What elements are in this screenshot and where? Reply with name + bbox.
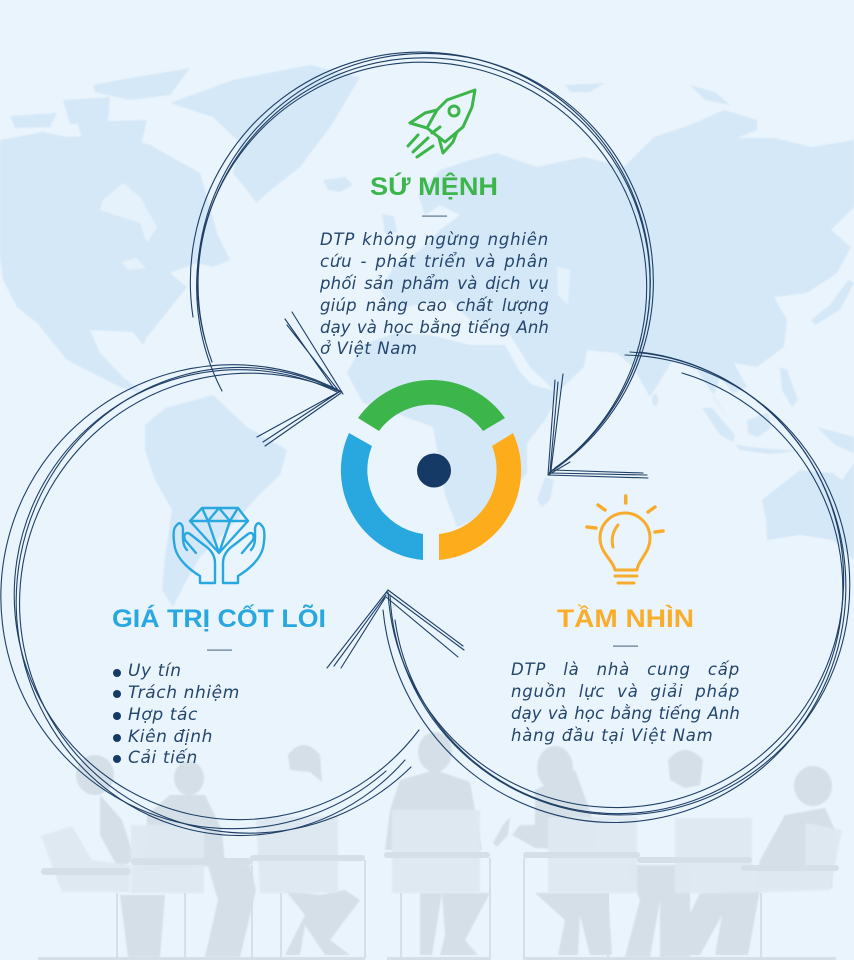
UK xyxy=(382,214,397,234)
heading: giá trị cốt lõi: GIÁ TRỊ CỐT LÕI xyxy=(112,603,326,633)
bullet list: giá trị cốt lõi: Hợp tác xyxy=(128,705,198,725)
Arctic islands xyxy=(10,68,190,150)
text block: sứ mệnh xyxy=(320,230,549,358)
person 5 xyxy=(512,746,612,955)
Africa xyxy=(347,333,560,527)
divider xyxy=(207,650,232,651)
world map background xyxy=(0,65,854,607)
heading: sứ mệnh: SỨ MỆNH xyxy=(370,171,498,201)
text block: tầm nhìn: DTP là nhà cung cấp xyxy=(511,660,740,679)
Iceland xyxy=(323,177,353,192)
Hudson Bay and inland water xyxy=(100,183,570,305)
heading: tầm nhìn: TẦM NHÌN xyxy=(557,604,694,633)
meeting chairs xyxy=(41,810,842,893)
text block: sứ mệnh: phối sản phẩm và dịch vụ xyxy=(320,274,549,293)
South America xyxy=(145,395,287,607)
text block: sứ mệnh: giúp nâng cao chất lượng xyxy=(320,296,549,315)
bullet list: giá trị cốt lõi: Trách nhiệm xyxy=(128,683,240,703)
person 2 xyxy=(145,761,256,957)
panel: tầm nhìn heading group xyxy=(557,496,694,647)
divider xyxy=(613,646,638,647)
arrowhead: left circle xyxy=(257,312,343,446)
arrowhead: top circle xyxy=(548,374,648,478)
bullet list: giá trị cốt lõi: Cải tiến xyxy=(128,748,198,768)
panel: sứ mệnh heading group xyxy=(370,90,498,217)
text block: tầm nhìn: dạy và học bằng tiếng Anh xyxy=(511,704,740,723)
Japan xyxy=(811,280,854,325)
icon: rocket xyxy=(408,90,475,157)
central ring xyxy=(341,380,521,560)
chair arms, legs and floor bars xyxy=(38,852,839,960)
person 3 xyxy=(258,745,360,955)
right sketched circle arrow xyxy=(327,352,850,822)
person 7 xyxy=(670,766,835,955)
arrowhead: right circle xyxy=(327,590,464,668)
bullets xyxy=(113,669,121,763)
text block: sứ mệnh: dạy và học bằng tiếng Anh xyxy=(320,318,549,337)
bullet list: giá trị cốt lõi: Uy tín xyxy=(128,661,182,681)
text block: sứ mệnh: cứu - phát triển và phân xyxy=(320,252,549,271)
bullet list: giá trị cốt lõi xyxy=(128,661,240,768)
Australia xyxy=(762,463,854,560)
Arctic Russia xyxy=(565,83,730,105)
panel: giá trị cốt lõi heading group xyxy=(112,508,326,763)
Sri Lanka xyxy=(652,394,658,406)
text block: tầm nhìn: nguồn lực và giải pháp xyxy=(511,682,740,701)
text block: sứ mệnh: DTP không ngừng nghiên xyxy=(320,230,549,249)
text block: tầm nhìn xyxy=(511,660,740,745)
Greenland xyxy=(170,65,360,203)
person 6 xyxy=(625,750,703,957)
Eurasia xyxy=(380,110,854,422)
divider xyxy=(422,216,447,217)
Madagascar xyxy=(537,477,554,507)
icon: diamond in hands xyxy=(174,508,264,583)
icon: light bulb xyxy=(587,496,663,583)
Philippines xyxy=(780,367,798,407)
text block: sứ mệnh: ở Việt Nam xyxy=(320,339,418,358)
North America xyxy=(0,132,230,393)
New Guinea xyxy=(817,427,854,453)
ring segment: green xyxy=(358,380,505,431)
left sketched circle arrow xyxy=(1,312,419,835)
ring segment: blue xyxy=(341,433,423,560)
Borneo xyxy=(747,413,771,437)
top sketched circle arrow xyxy=(190,52,653,478)
meeting people silhouettes xyxy=(76,732,835,957)
person 1 xyxy=(76,755,165,957)
bullet list: giá trị cốt lõi: Kiên định xyxy=(128,727,213,747)
text block: tầm nhìn: hàng đầu tại Việt Nam xyxy=(511,726,714,745)
Sumatra and Java xyxy=(702,408,800,454)
center dot xyxy=(417,454,451,488)
ring segment: orange xyxy=(439,433,521,560)
person 4 xyxy=(385,732,510,955)
